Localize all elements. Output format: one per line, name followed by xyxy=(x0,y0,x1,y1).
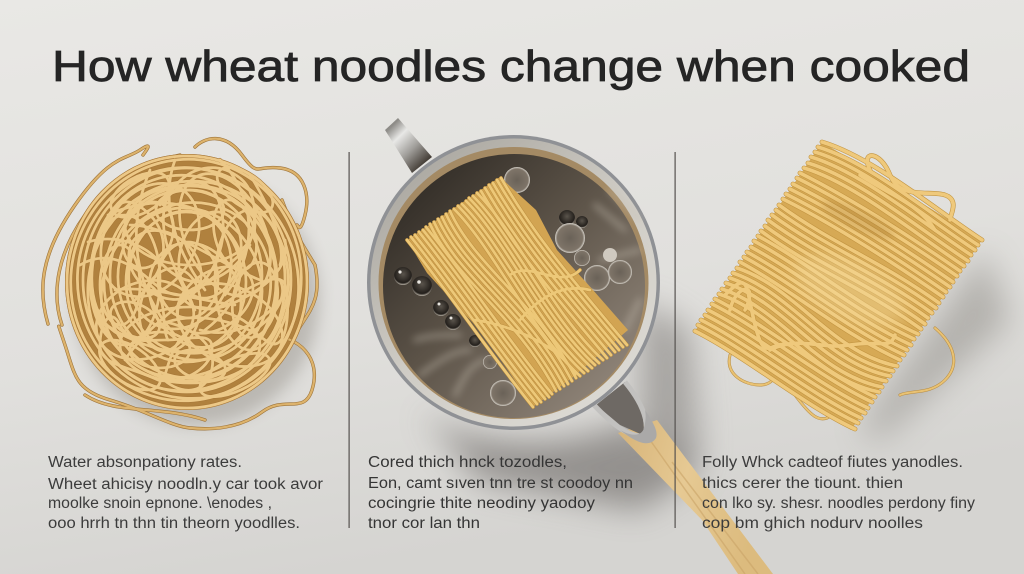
bubbles right xyxy=(483,167,632,406)
caption: cooking: cocingrie thite neodiny yaodoy xyxy=(368,495,595,512)
caption: fully cooked: con lko sy. shesr. noodles perdony finy xyxy=(702,495,975,512)
caption: fully cooked: cop bm ghich nodurv noolles xyxy=(702,515,923,532)
boiling water xyxy=(383,154,645,418)
title: How wheat noodles change when cooked xyxy=(52,42,970,91)
pot cast shadow xyxy=(420,300,700,510)
water highlights xyxy=(415,190,640,395)
caption: cooking: tnor cor lan thn xyxy=(368,515,480,532)
pot side handle xyxy=(385,118,432,173)
divider left xyxy=(348,152,350,528)
block shadow xyxy=(860,250,1010,440)
nest shadow xyxy=(75,175,319,425)
caption: water absorption: Wheet ahicisy noodln.y car took avor xyxy=(48,476,323,493)
caption: cooking xyxy=(368,454,633,532)
caption: water absorption xyxy=(48,454,323,532)
caption: cooking: Cored thich hnck tozodles, xyxy=(368,454,567,471)
bubbles left xyxy=(394,267,481,347)
raw noodle nest xyxy=(43,138,328,429)
caption: fully cooked: thics cerer the tiount. thien xyxy=(702,475,903,492)
caption: cooking: Eon, camt sıven tnn tre st coodoy nn xyxy=(368,475,633,492)
caption: fully cooked: Folly Whck cadteof fiutes yanodles. xyxy=(702,454,963,471)
inner wall xyxy=(378,147,648,419)
caption: water absorption: Water absonpationy rates. xyxy=(48,454,242,471)
divider right xyxy=(674,152,676,528)
caption: fully cooked xyxy=(702,454,975,532)
caption: water absorption: ooo hrrh tn thn tin theorn yoodlles. xyxy=(48,515,300,532)
panel: boiling pot xyxy=(367,118,773,574)
cooked noodle block xyxy=(695,142,982,430)
noodles in pot xyxy=(407,177,628,407)
panel: cooked noodles xyxy=(695,142,1010,532)
pot rim xyxy=(367,135,660,430)
panel: raw noodles xyxy=(43,138,328,532)
wooden spoon handle xyxy=(594,382,773,574)
caption: water absorption: moolke snoin epnone. \enodes , xyxy=(48,495,272,512)
